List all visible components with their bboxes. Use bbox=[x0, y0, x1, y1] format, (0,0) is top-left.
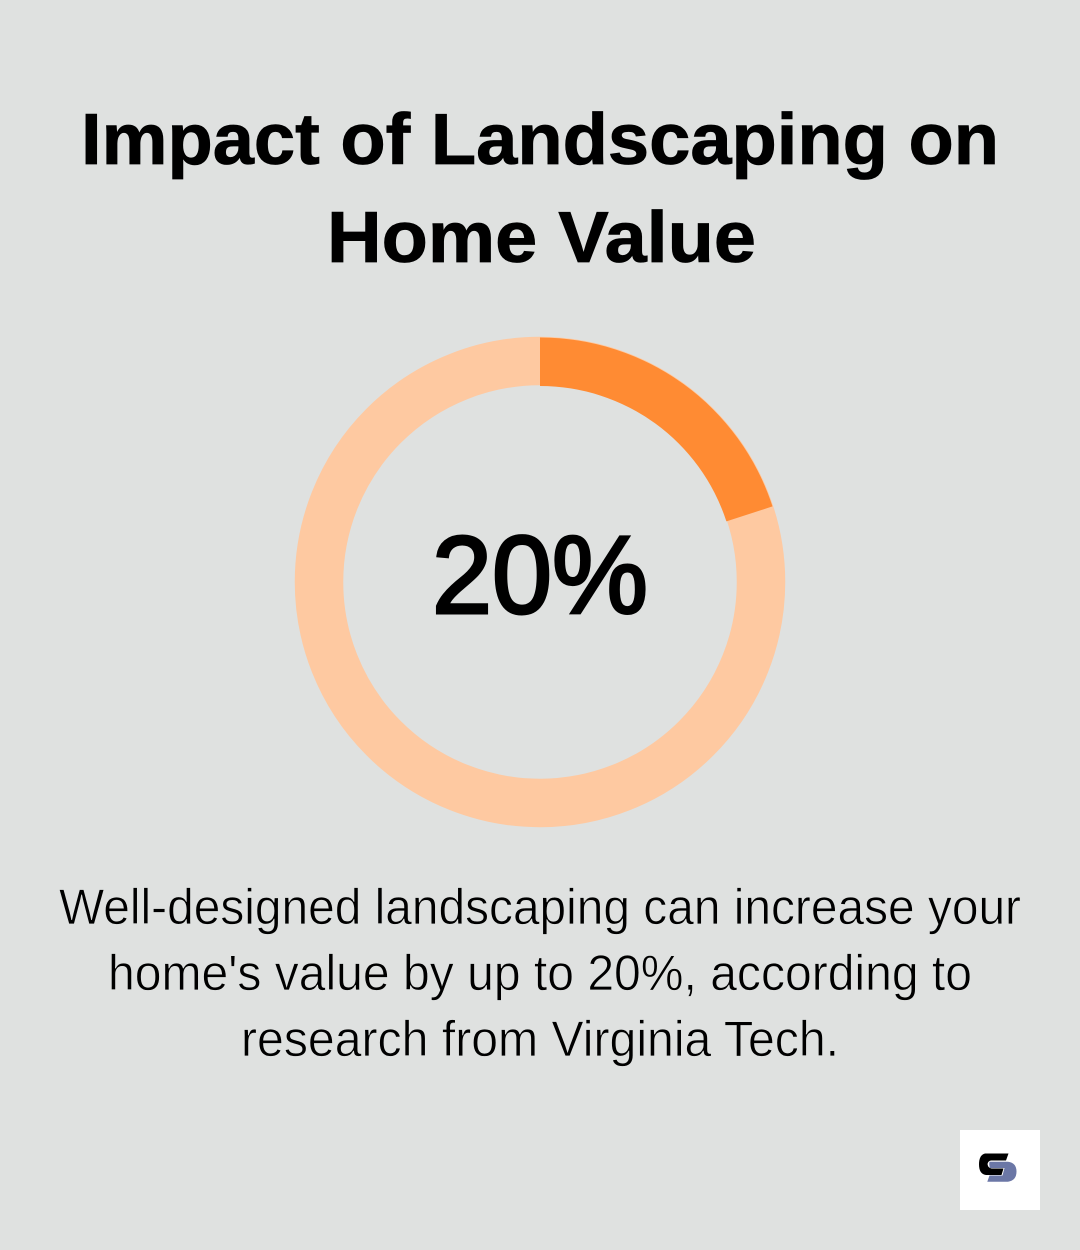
description text: Well-designed landscaping can increase your bbox=[59, 879, 1021, 935]
description text bbox=[59, 879, 1021, 1067]
logo background bbox=[960, 1130, 1040, 1210]
description text: research from Virginia Tech. bbox=[241, 1011, 839, 1067]
logo mark: black upper shape bbox=[979, 1154, 1008, 1175]
donut highlighted segment bbox=[540, 338, 772, 521]
title bbox=[81, 100, 999, 278]
donut center value: 20% bbox=[432, 514, 648, 637]
title: Impact of Landscaping on bbox=[81, 100, 999, 180]
title: Home Value bbox=[327, 198, 756, 278]
logo badge bbox=[960, 1130, 1040, 1210]
donut track bbox=[319, 361, 761, 803]
description text: home's value by up to 20%, according to bbox=[108, 945, 972, 1001]
logo mark: blue lower shape bbox=[987, 1162, 1016, 1182]
donut chart: 20% bbox=[319, 338, 772, 803]
